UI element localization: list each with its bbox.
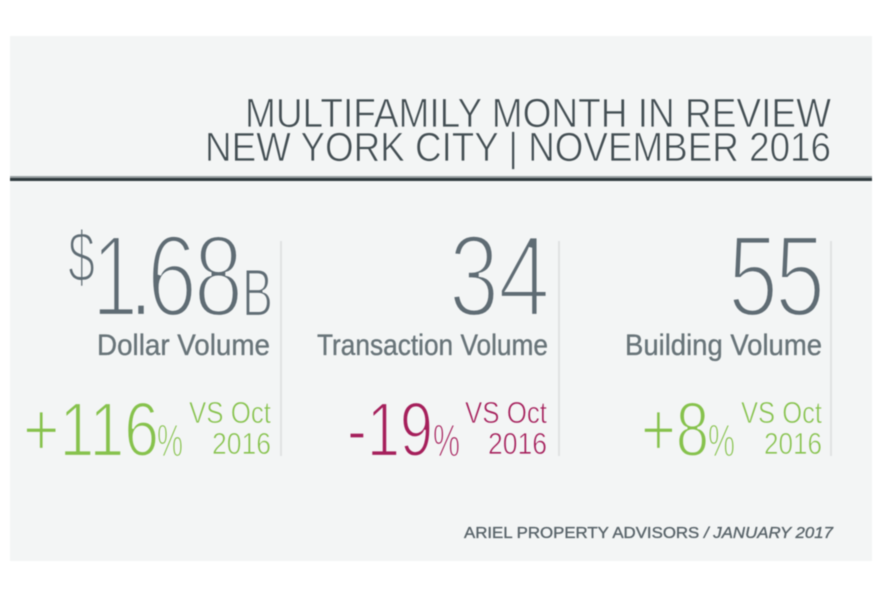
comparison: vs oct 2016: 2016 [764,426,822,461]
divider [830,241,832,456]
comparison: vs oct 2016 [741,395,822,461]
big number: $1.68B: 6 [147,211,197,341]
title: NEW YORK CITY | NOVEMBER 2016 [205,124,831,170]
change: +116%: % [157,415,183,466]
big number: $1.68B [68,211,273,341]
big number: 55: 5 [728,211,778,341]
big number: 55: 5 [775,211,825,341]
big number: $1.68B: $ [68,218,95,298]
change: -19%: % [433,415,460,466]
big number: $1.68B: 1 [92,211,138,341]
column: transaction volume [317,211,550,473]
change: -19%: -19 [347,387,433,473]
label: building volume: Building Volume [625,329,822,362]
divider [558,241,560,456]
label: transaction volume: Transaction Volume [317,329,548,362]
big number: 34: 4 [498,211,550,341]
footer credit: ARIEL PROPERTY ADVISORS / JANUARY 2017 [464,525,834,542]
big number: 34: 3 [449,211,499,341]
big number: $1.68B: 8 [194,211,243,341]
comparison: vs oct 2016 [189,395,271,461]
comparison: vs oct 2016 [465,395,547,461]
big number: 55 [728,211,825,341]
column: dollar volume [23,211,273,473]
comparison: vs oct 2016: VS Oct [189,395,271,430]
change: +8%: % [708,415,735,466]
title: MULTIFAMILY MONTH IN REVIEW [245,90,831,136]
label: dollar volume: Dollar Volume [97,329,270,362]
change: +8%: +8 [641,387,709,473]
comparison: vs oct 2016: 2016 [212,426,271,461]
change: +116%: +116 [23,387,159,473]
divider [280,241,282,456]
big number: 34 [449,211,550,341]
column: building volume [625,211,825,473]
comparison: vs oct 2016: 2016 [488,426,547,461]
header rule [10,176,872,181]
comparison: vs oct 2016: VS Oct [465,395,547,430]
comparison: vs oct 2016: VS Oct [741,395,822,430]
big number: $1.68B: . [128,211,154,341]
title [205,90,831,170]
big number: $1.68B: B [242,255,273,331]
